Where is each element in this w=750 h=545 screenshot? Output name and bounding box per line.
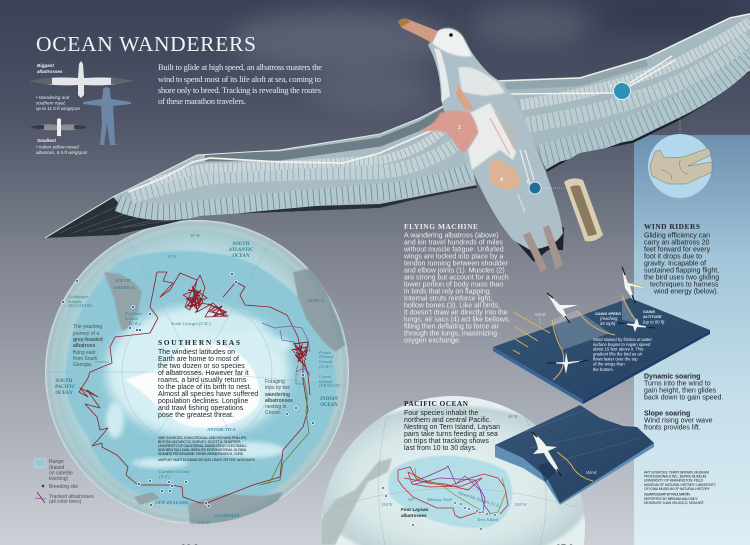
illustration: albatross bbox=[45, 13, 750, 273]
globe labels: Galápagos bbox=[68, 294, 88, 299]
text: wind riders: sustained flapping flight, bbox=[644, 268, 719, 274]
globe labels: (S.AF.) bbox=[319, 364, 332, 369]
map credits: SEABIRD PROGRAMME; HENRI WEIMERSKIRCH, CNRS bbox=[158, 452, 244, 456]
diagram: dynamic soaring: GAINS bbox=[643, 310, 655, 314]
globe labels: AUSTRALIA bbox=[213, 513, 240, 518]
pacific labels and dots: 150°E bbox=[381, 502, 393, 507]
text: southern seas: the two dozen or so species bbox=[158, 363, 245, 370]
text: flying machine bbox=[403, 222, 510, 344]
text: flying machine: lower portion of body mass than bbox=[404, 282, 503, 288]
text: pacific ocean bbox=[404, 399, 500, 452]
text: southern seas: Earth are home to most of bbox=[158, 356, 239, 363]
intro text: wind to spend most of its life aloft at sea, coming to bbox=[158, 74, 321, 84]
pacific labels and dots: 150°W bbox=[514, 502, 528, 507]
text: wind riders: techniques to harness bbox=[650, 282, 719, 288]
wingspan comparison: albatrosses bbox=[37, 69, 63, 74]
text: flying machine: hollow bones (3). Like all birds, bbox=[404, 302, 500, 310]
range tracks: south atlantic bbox=[79, 272, 308, 503]
range bbox=[388, 456, 512, 528]
globe labels: SOUTH bbox=[233, 242, 251, 247]
map credits: MAP SOURCES: JOHN CROXALL AND RICHARD PHILLIPS, bbox=[158, 436, 247, 440]
text: southern seas: SOUTHERN SEAS bbox=[158, 338, 241, 347]
wingspan comparison: Smallest bbox=[37, 138, 56, 143]
bird bbox=[532, 432, 561, 476]
text: flying machine: through the lungs, maximizing bbox=[404, 330, 497, 338]
map credits bbox=[158, 436, 256, 462]
pacific labels and dots: Tern Island bbox=[477, 517, 499, 522]
globe labels: Islands bbox=[318, 379, 332, 384]
globe labels: Falkland bbox=[124, 311, 142, 316]
note: wandering albatrosses: Foraging bbox=[265, 379, 285, 385]
text: flying machine: without muscle fatigue: Unfurled bbox=[403, 246, 504, 254]
pale interior bbox=[106, 306, 290, 438]
globe labels: Prince bbox=[318, 350, 331, 355]
globe labels bbox=[55, 233, 340, 525]
wingspan comparison: • Indian yellow-nosed bbox=[36, 144, 79, 150]
wind arrow bbox=[557, 452, 593, 481]
callout: tendon circle bbox=[610, 82, 680, 133]
note: grey-headed albatross: flying east bbox=[73, 350, 96, 356]
text: southern seas bbox=[158, 338, 258, 419]
left wing bbox=[45, 105, 477, 238]
art credits: UNIVERSITY OF WASHINGTON; FIELD bbox=[644, 478, 703, 482]
icon: smallest albatross bbox=[30, 117, 88, 137]
diagram: dynamic soaring: Wind slowed by friction at water bbox=[593, 337, 652, 342]
diagram: dynamic soaring: surface begins to regain speed bbox=[593, 342, 651, 347]
globe labels: 30°W bbox=[190, 233, 201, 238]
globe: pacific ocean bbox=[321, 396, 585, 545]
diagram: dynamic soaring: flows faster over the top bbox=[593, 356, 638, 362]
note: grey-headed albatross bbox=[72, 324, 109, 368]
icon: biggest albatross bbox=[30, 61, 133, 98]
wind arrows bbox=[513, 312, 550, 354]
intro text bbox=[158, 62, 322, 106]
diagram: dynamic soaring: gradient lifts the bird as air bbox=[593, 352, 643, 356]
muscle bbox=[420, 111, 478, 153]
text: flying machine: oxygen exchange. bbox=[404, 338, 461, 344]
globe labels: ANTARCTICA bbox=[206, 427, 236, 432]
legend: on satellite bbox=[49, 470, 73, 476]
globe labels: AMERICA bbox=[112, 285, 134, 290]
text: slope soaring: Slope soaring bbox=[644, 410, 690, 418]
map credits: AND BEN SULLIVAN, BIRDLIFE INTERNATIONAL GLOBAL bbox=[158, 448, 247, 452]
intro text: shore only to breed. Tracking is revealing the routes bbox=[158, 85, 321, 95]
text: southern seas: roams, a bird usually returns bbox=[158, 377, 247, 384]
globe labels: (N.Z.) bbox=[159, 474, 170, 479]
art credits: DESIGN BY JUAN VELASCO, NGM ART bbox=[644, 501, 705, 505]
birds bbox=[547, 293, 578, 323]
breeding sites: south bbox=[62, 273, 314, 507]
text: flying machine: tendon running between shoulder bbox=[404, 260, 509, 268]
text: wind riders: Gliding efficiency can bbox=[644, 232, 710, 240]
right wing bbox=[495, 13, 750, 172]
globe labels: Crozet bbox=[319, 374, 332, 379]
text: flying machine: are strong but account for a much bbox=[404, 274, 509, 282]
text: flying machine: lungs; air sacs (4) act like bellows, bbox=[404, 316, 510, 324]
text: wind riders: foot it drops due to bbox=[644, 254, 702, 260]
note: grey-headed albatross: The yearlong bbox=[73, 324, 102, 330]
ribcage bbox=[468, 103, 516, 170]
globe labels: (ECUADOR) bbox=[68, 303, 93, 308]
text: southern seas: Almost all species have suffered bbox=[158, 391, 258, 398]
continent: Asia bbox=[321, 458, 392, 545]
text: pacific ocean: PACIFIC OCEAN bbox=[404, 399, 469, 408]
wingspan comparison: southern royal, bbox=[36, 100, 66, 106]
globe labels: (U.K.) bbox=[129, 321, 141, 326]
globe labels: SOUTH bbox=[56, 379, 74, 384]
legend: (based bbox=[49, 465, 65, 471]
art credits: PROFESSIONALS INC.; BURKE MUSEUM, bbox=[644, 474, 707, 478]
text: pacific ocean: on trips that tracking shows bbox=[404, 438, 489, 445]
icon: human figure bbox=[83, 87, 131, 145]
diagram: dynamic soaring bbox=[493, 267, 710, 404]
labels: Wind bbox=[535, 312, 546, 317]
globe labels: OCEAN bbox=[232, 254, 250, 259]
text: flying machine: wings are locked into place by a bbox=[403, 254, 503, 260]
text: southern seas: and trawl fishing operations bbox=[158, 405, 244, 412]
flight feathers bbox=[118, 170, 475, 212]
intro text: of these marathon travelers. bbox=[158, 96, 246, 106]
art credits: REPORTED BY BRENNA MALONEY. bbox=[644, 497, 698, 501]
continent: South America bbox=[104, 272, 142, 331]
text: flying machine: it doesn't draw air directly into the bbox=[404, 310, 508, 316]
text: dynamic soaring: Turns into the wind to bbox=[644, 380, 711, 388]
body and head bbox=[398, 19, 564, 273]
note: grey-headed albatross: albatross bbox=[73, 343, 95, 349]
diagram: dynamic soaring: (reaching bbox=[600, 316, 618, 321]
globe labels: Edward bbox=[318, 354, 334, 359]
note: grey-headed albatross: grey-headed bbox=[73, 337, 103, 343]
pacific labels and dots bbox=[381, 414, 528, 530]
globe labels: SOUTH bbox=[115, 278, 131, 283]
wingspan comparison: Biggest bbox=[37, 63, 54, 68]
beak bbox=[398, 19, 438, 43]
coverts bbox=[130, 145, 455, 197]
panel: wind riders background bbox=[634, 135, 750, 545]
text: slope soaring: Wind rising over wave bbox=[644, 418, 713, 424]
callout: hollow bone bbox=[526, 178, 603, 241]
legend: (all color lines) bbox=[49, 499, 82, 505]
globe: southern seas bbox=[45, 220, 349, 526]
pacific labels and dots: albatrosses bbox=[401, 513, 427, 518]
note: wandering albatrosses: wandering bbox=[264, 392, 290, 398]
text: southern seas: of albatrosses. However far it bbox=[158, 370, 249, 377]
range band bbox=[65, 251, 336, 508]
art credits: ART SOURCES: TERRY BROWN, MUSEUM bbox=[644, 470, 709, 474]
text: slope soaring: fronts provides lift. bbox=[644, 424, 701, 432]
globe labels: AFRICA bbox=[306, 298, 324, 303]
side wall bbox=[495, 443, 654, 505]
callout: tendon circle: 1 bbox=[610, 83, 613, 88]
pacific labels and dots: Hawaiian Islands (U.S.) bbox=[457, 490, 502, 509]
callout: elbow joint bbox=[648, 134, 712, 198]
continent: Africa bbox=[293, 268, 345, 352]
diagram: slope soaring: Wind bbox=[586, 470, 597, 475]
diagram: dynamic soaring: ALTITUDE bbox=[642, 315, 662, 319]
diagram: dynamic soaring: of the wings than bbox=[593, 362, 625, 366]
globe labels: Campbell Island bbox=[159, 469, 190, 474]
muscle: 2 bbox=[458, 125, 461, 131]
text: pacific ocean: last from 10 to 30 days. bbox=[404, 445, 477, 452]
foot bbox=[523, 232, 547, 273]
globe labels: ATLANTIC bbox=[228, 248, 254, 253]
legend: Breeding site bbox=[49, 484, 78, 490]
legend: Tracked albatrosses bbox=[49, 494, 94, 500]
flight swoosh bbox=[552, 295, 638, 350]
text: flying machine: FLYING MACHINE bbox=[404, 222, 479, 231]
art credits: OF IOWA MUSEUM OF NATURAL HISTORY bbox=[644, 487, 711, 491]
text: pacific ocean: pairs take turns feeding at sea bbox=[404, 431, 498, 438]
legend: tracking) bbox=[49, 476, 69, 482]
map credits: BRITISH ANTARCTIC SURVEY; SCOTT A. SHAFFER, bbox=[158, 440, 241, 444]
note: wandering albatrosses: albatrosses bbox=[265, 398, 293, 404]
callout: hollow bone: 3 bbox=[526, 179, 529, 184]
text: flying machine: and elbow joints (1). Muscles (2) bbox=[404, 268, 505, 274]
globe labels: South Georgia (U.K.) bbox=[171, 321, 211, 326]
map credits: MAPS BY MARTIN GAMACHE AND LISA R. RITTER, NGM MAPS bbox=[158, 458, 256, 462]
text: flying machine: filling then deflating to force air bbox=[404, 324, 500, 330]
diagram: dynamic soaring: (up to 80 ft) bbox=[643, 320, 665, 324]
note: wandering albatrosses: Crozet. bbox=[265, 410, 281, 416]
text: flying machine: in birds that rely on flapping. bbox=[404, 288, 492, 296]
note: wandering albatrosses: trips by two bbox=[265, 385, 291, 391]
continent: Australia bbox=[188, 492, 283, 526]
neck back bbox=[434, 48, 450, 102]
globe labels: 150°E bbox=[198, 520, 210, 525]
legend bbox=[35, 459, 94, 505]
continent: New Zealand bbox=[134, 492, 160, 505]
meridians bbox=[48, 220, 345, 505]
text: wind riders: the bird uses two gliding bbox=[644, 274, 719, 282]
globe labels: Islands bbox=[318, 359, 332, 364]
text: southern seas: population declines. Longline bbox=[158, 398, 248, 405]
text: wind riders: carry an albatross 20 bbox=[644, 240, 709, 246]
text: wind riders: WIND RIDERS bbox=[644, 222, 701, 231]
sea surface bbox=[495, 405, 654, 503]
wing bone bbox=[128, 128, 437, 192]
text: dynamic soaring: Dynamic soaring bbox=[644, 374, 700, 380]
text: dynamic soaring: gain height, then glides bbox=[644, 388, 716, 394]
text: flying machine: Internal struts reinforce light, bbox=[404, 296, 492, 302]
globe labels: NEW ZEALAND bbox=[154, 500, 189, 505]
intro text: Built to glide at high speed, an albatross masters the bbox=[158, 62, 322, 72]
text: southern seas: The windiest latitudes on bbox=[158, 349, 235, 356]
pacific labels and dots: 30° bbox=[408, 497, 415, 502]
text: dynamic soaring bbox=[644, 374, 723, 402]
diagram: slope soaring bbox=[495, 405, 654, 505]
globe labels: OCEAN bbox=[55, 391, 73, 396]
text: flying machine: A wandering albatross (above) bbox=[404, 232, 499, 240]
legend: Range bbox=[49, 459, 64, 465]
art credits: ALBATROSS ART BY RAÚL MARTÍN bbox=[644, 492, 690, 496]
art credits bbox=[644, 470, 717, 505]
wingspan comparison: albatross, 6.5-ft wingspan bbox=[36, 150, 88, 155]
air sacs bbox=[490, 160, 520, 190]
globe labels: (FRANCE) bbox=[319, 383, 340, 388]
wing bone and tendon bbox=[495, 56, 675, 100]
text: slope soaring bbox=[644, 410, 713, 432]
pacific labels and dots: 45°N bbox=[508, 414, 518, 419]
dark primaries bbox=[45, 185, 477, 238]
globe labels: 30°S bbox=[167, 254, 176, 259]
note: wandering albatrosses bbox=[264, 374, 303, 416]
globe labels: OCEAN bbox=[320, 403, 338, 408]
tail bbox=[513, 210, 564, 262]
diagram: dynamic soaring: GAINS SPEED bbox=[595, 312, 621, 316]
wingspan comparison: • Wandering and bbox=[36, 95, 70, 100]
text: wind riders: gravity. Incapable of bbox=[644, 260, 706, 268]
diagram: dynamic soaring: about 15 feet above it. This bbox=[593, 346, 643, 352]
text: wind riders bbox=[644, 222, 719, 296]
text: wind riders: feet forward for every bbox=[644, 246, 711, 254]
pacific labels and dots: Four Laysan bbox=[401, 507, 429, 512]
pacific labels and dots: Midway Atoll bbox=[426, 497, 453, 502]
text: pacific ocean: northern and central Pacific. bbox=[404, 417, 491, 424]
pacific tracks bbox=[398, 466, 508, 518]
air sacs: 4 bbox=[500, 177, 504, 183]
diagram: dynamic soaring: 40 mph) bbox=[600, 321, 616, 326]
title: OCEAN WANDERERS bbox=[36, 32, 256, 56]
text: flying machine: and kin travel hundreds of miles bbox=[404, 240, 503, 246]
note: grey-headed albatross: Georgia. bbox=[73, 362, 92, 368]
globe labels: Islands bbox=[124, 316, 138, 321]
text: pacific ocean: Four species inhabit the bbox=[404, 410, 478, 417]
text: dynamic soaring: back down to gain speed. bbox=[644, 394, 723, 402]
head bbox=[432, 28, 472, 56]
shoulder plumage bbox=[458, 67, 505, 96]
text: wind riders: wind energy (below). bbox=[653, 288, 719, 296]
globe labels: Islands bbox=[67, 299, 81, 304]
diagram: dynamic soaring: the bottom. bbox=[593, 367, 614, 372]
text: pacific ocean: Nesting on Tern Island, Laysan bbox=[404, 424, 500, 431]
wingspan comparison bbox=[30, 61, 133, 155]
art credits: MUSEUM OF NATURAL HISTORY; UNIVERSITY bbox=[644, 483, 717, 487]
upper row bbox=[205, 112, 445, 157]
note: grey-headed albatross: from South bbox=[73, 356, 98, 362]
text: southern seas: to the place of its birth to nest. bbox=[158, 384, 251, 391]
note: grey-headed albatross: journey of a bbox=[72, 331, 99, 337]
foraging trips: prince edward and crozet bbox=[260, 323, 310, 485]
note: wandering albatrosses: nesting in bbox=[265, 404, 287, 410]
globe labels: PACIFIC bbox=[55, 385, 76, 390]
continent: Antarctica bbox=[125, 342, 260, 428]
page figures bbox=[181, 543, 574, 545]
globe labels: INDIAN bbox=[319, 397, 338, 402]
wingspan comparison: up to 11.5-ft wingspan bbox=[36, 106, 80, 111]
text: southern seas: pose the greatest threat. bbox=[158, 412, 234, 419]
map credits: UNIVERSITY OF CALIFORNIA, SANTA CRUZ; CLEO SMALL bbox=[158, 444, 247, 448]
track: grey-headed albatross bbox=[79, 272, 308, 503]
